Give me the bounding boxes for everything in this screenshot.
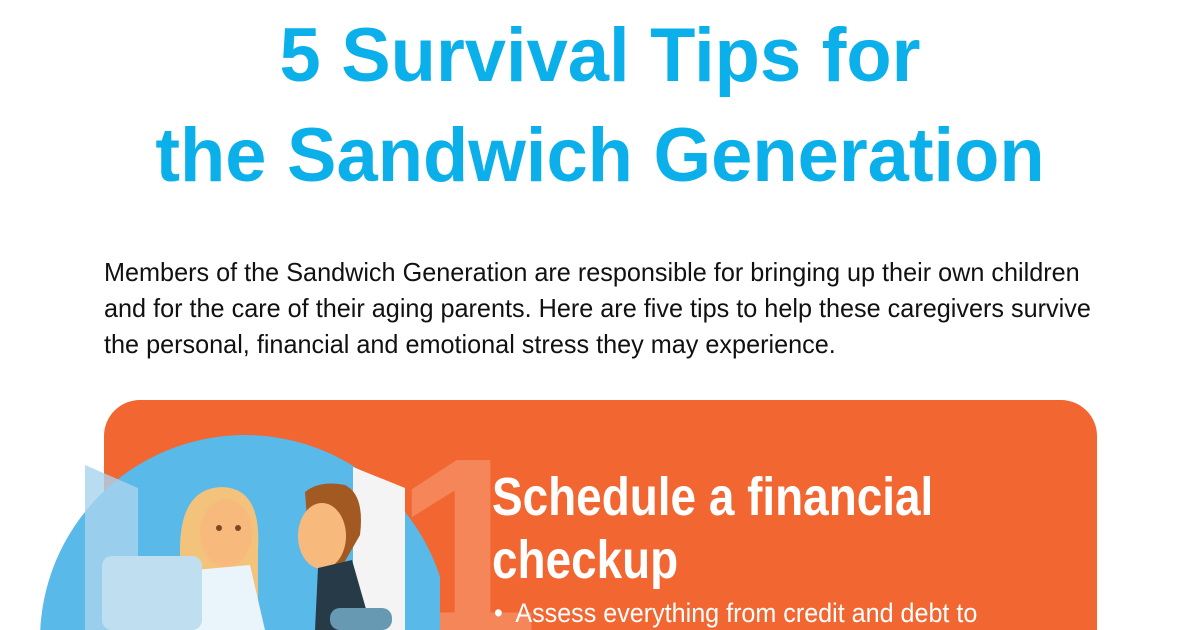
panel: tip 1 <box>104 400 1097 630</box>
monitor <box>102 556 202 630</box>
bullet text: • Assess everything from credit and debt to <box>494 598 977 628</box>
tip heading: Schedule a financial <box>492 467 933 527</box>
illustration: advisor meeting <box>40 435 440 630</box>
title: the Sandwich Generation <box>155 113 1045 198</box>
woman <box>180 487 265 630</box>
intro text: the personal, financial and emotional stress they may experience. <box>104 329 836 359</box>
tip heading <box>492 467 933 590</box>
title <box>155 13 1045 198</box>
man <box>298 484 392 630</box>
intro text: Members of the Sandwich Generation are responsible for bringing up their own children <box>104 257 1080 287</box>
intro text <box>104 257 1091 359</box>
tip heading: checkup <box>492 530 678 590</box>
intro text: and for the care of their aging parents. Here are five tips to help these caregivers survive <box>104 293 1091 323</box>
title: 5 Survival Tips for <box>279 13 921 98</box>
